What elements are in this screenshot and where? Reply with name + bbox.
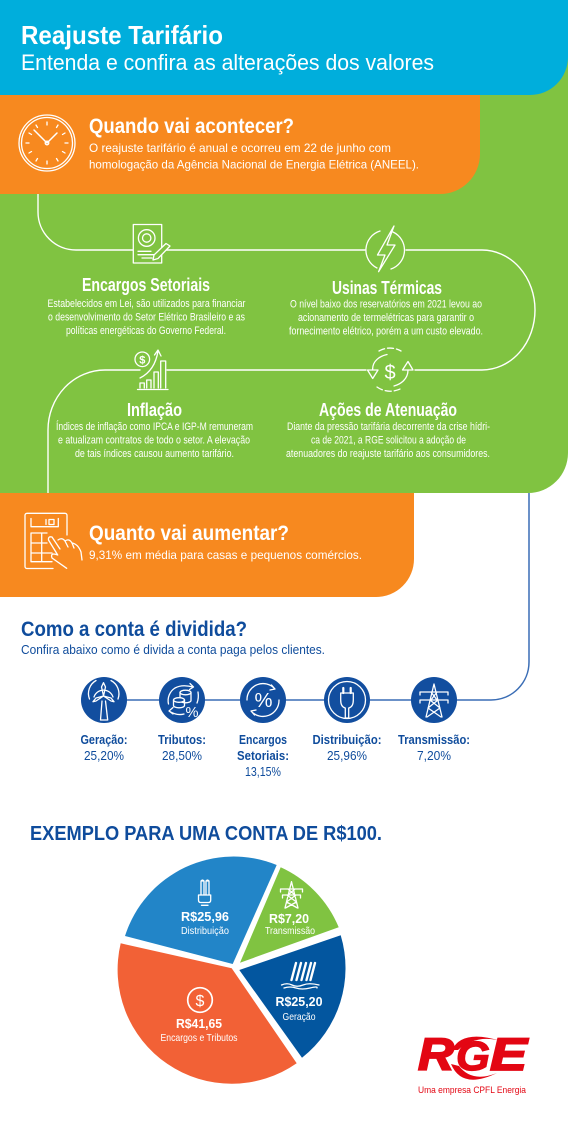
text block: homologação da Agência Nacional de Energia Elétrica (ANEEL).: [89, 158, 419, 172]
icon: wind turbine: [88, 680, 119, 720]
item: encargos setoriais: %: [254, 690, 273, 712]
text block: acionamento de termelétricas para garantir o: [298, 312, 474, 324]
panel: usinas termicas: [289, 226, 483, 338]
item: tributos: [158, 677, 206, 763]
icon: clock: [19, 115, 75, 171]
text block: [286, 421, 490, 460]
heading: Como a conta é dividida?: [21, 618, 247, 641]
label: [237, 732, 289, 763]
slice: distribuicao: [125, 857, 277, 964]
label: Encargos: [239, 732, 287, 747]
item: tributos: %: [186, 704, 198, 721]
slice: encargos e tributos: [118, 943, 297, 1084]
label: Transmissão:: [398, 732, 470, 747]
connector: blue route line: [104, 493, 529, 700]
item: distribuicao: [312, 677, 382, 763]
text block: [56, 420, 253, 460]
heading: Quando vai acontecer?: [89, 115, 294, 138]
item: geracao: [80, 677, 128, 763]
subtitle: Entenda e confira as alterações dos valores: [21, 50, 434, 75]
text block: Confira abaixo como é divida a conta paga pelos clientes.: [21, 642, 325, 657]
connector: white route line: [38, 194, 535, 493]
text block: Estabelecidos em Lei, são utilizados para financiar: [48, 298, 246, 310]
heading: Quanto vai aumentar?: [89, 522, 289, 545]
icon: tower: [280, 882, 302, 908]
section: como a conta e dividida: [21, 618, 325, 657]
value: 25,96%: [327, 748, 367, 763]
title: Reajuste Tarifário: [21, 20, 223, 50]
value: 7,20%: [417, 748, 451, 763]
text block: O reajuste tarifário é anual e ocorreu em 22 de junho com: [89, 141, 391, 155]
value: R$7,20: [269, 911, 309, 926]
heading: Encargos Setoriais: [82, 275, 210, 295]
icon: document with pencil: [133, 224, 170, 263]
icon: growth chart with coin: $: [139, 354, 145, 366]
text block: [289, 298, 483, 338]
pie chart: [118, 857, 346, 1084]
label: Distribuição:: [312, 732, 382, 747]
value: R$41,65: [176, 1016, 222, 1031]
heading: Inflação: [127, 400, 182, 420]
label: Tributos:: [158, 732, 206, 747]
label: Geração:: [80, 732, 128, 747]
text block: 9,31% em média para casas e pequenos comércios.: [89, 548, 362, 562]
slice: transmissao: [240, 867, 339, 963]
text block: atenuadores do reajuste tarifário aos consumidores.: [286, 448, 490, 460]
text block: ca de 2021, a RGE solicitou a adoção de: [311, 434, 466, 446]
tagline: Uma empresa CPFL Energia: [418, 1085, 527, 1096]
icon: lamp: [198, 880, 211, 905]
text block: O nível baixo dos reservatórios em 2021 levou ao: [290, 298, 482, 310]
logo: RGE: R: [418, 1029, 455, 1080]
panel: inflacao: [56, 350, 253, 460]
panel: encargos setoriais: [48, 224, 246, 337]
text block: [48, 298, 246, 337]
text block: Índices de inflação como IPCA e IGP-M remuneram: [56, 420, 253, 433]
panel: green background: [0, 50, 568, 493]
icon: plug: [328, 682, 366, 718]
value: 28,50%: [162, 748, 202, 763]
icon: power tower: [420, 684, 448, 717]
label: Encargos e Tributos: [160, 1032, 238, 1044]
value: R$25,96: [181, 909, 229, 924]
text block: fornecimento elétrico, porém a um custo elevado.: [289, 326, 483, 338]
logo: RGE: [418, 1029, 529, 1096]
logo: RGE: G: [456, 1033, 490, 1079]
item: encargos setoriais: [237, 677, 289, 779]
icon: dollar circle: [188, 988, 212, 1012]
text block: Diante da pressão tarifária decorrente da crise hídri-: [287, 421, 490, 433]
text block: [89, 141, 419, 172]
icon: hydro dam: [282, 963, 319, 989]
panel: acoes de atenuacao: [286, 348, 490, 460]
icon: coins and percent: [168, 684, 198, 715]
icon: dollar with cycle arrows: $: [384, 362, 396, 384]
icon: lightning bolt: [366, 226, 404, 272]
value: 25,20%: [84, 748, 124, 763]
label: Geração: [282, 1011, 316, 1023]
logo: RGE: E: [490, 1029, 529, 1080]
heading: Ações de Atenuação: [319, 400, 457, 420]
text block: e atualizam contratos de todo o setor. A elevação: [58, 434, 250, 446]
text block: de tais índices causou aumento tarifário.: [75, 448, 234, 460]
value: 13,15%: [245, 764, 281, 779]
heading: exemplo: EXEMPLO PARA UMA CONTA DE R$100.: [30, 823, 382, 845]
label: Setoriais:: [237, 748, 289, 763]
text block: o desenvolvimento do Setor Elétrico Brasileiro e as: [48, 312, 245, 324]
item: transmissao: [398, 677, 470, 763]
icon: dollar circle: $: [196, 993, 205, 1010]
panel: quanto vai aumentar: [0, 493, 414, 597]
text block: políticas energéticas do Governo Federal.: [66, 325, 226, 337]
value: R$25,20: [276, 994, 322, 1009]
heading: Usinas Térmicas: [332, 278, 442, 298]
panel: quando vai acontecer: [0, 95, 480, 194]
panel: header: [0, 0, 568, 95]
icon: dollar with cycle arrows: [368, 348, 413, 391]
icon: growth chart with coin: [135, 350, 168, 390]
label: Transmissão: [265, 925, 315, 937]
icon: percent cycle: [247, 684, 279, 716]
label: Distribuição: [181, 925, 229, 937]
icon: logo swoosh: [451, 1037, 501, 1080]
icon: calculator and hand: [25, 513, 82, 568]
slice: geracao: [239, 935, 346, 1058]
